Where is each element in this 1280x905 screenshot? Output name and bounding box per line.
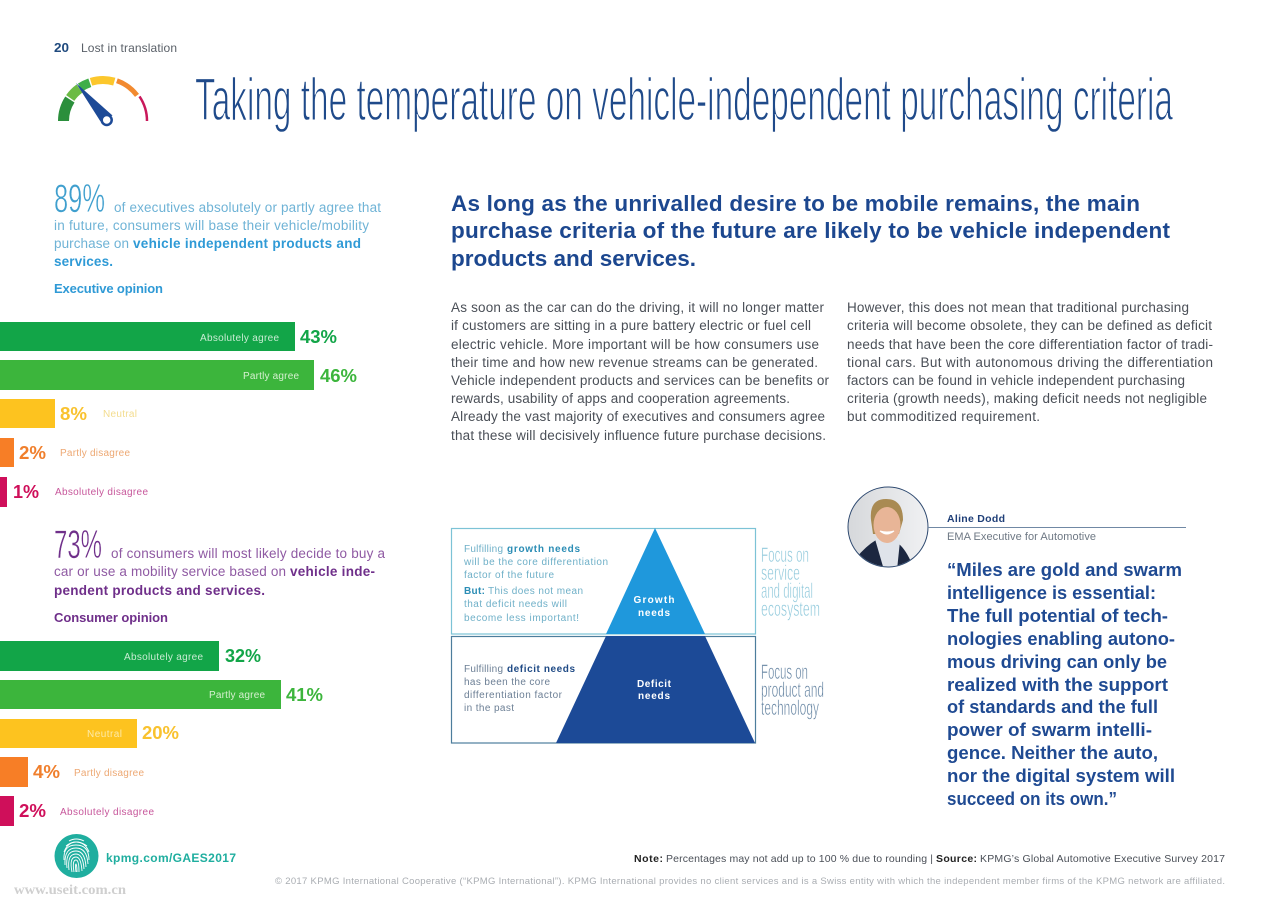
body text: left column xyxy=(451,300,830,443)
icon: fingerprint xyxy=(54,834,98,878)
body text: right column: criteria (growth needs), making deficit needs not negligible xyxy=(847,391,1207,406)
body text: left column: rewards, usability of apps and cooperation agreements. xyxy=(451,391,790,406)
body text: left column: electric vehicle. More important will be how consumers use xyxy=(451,337,819,352)
page header: 20 xyxy=(54,40,69,55)
panel: growth needs: that deficit needs will xyxy=(464,599,567,610)
panel: growth needs: needs xyxy=(638,608,670,619)
body text: right column: However, this does not mean that traditional purchasing xyxy=(847,300,1189,315)
bar chart: executive opinion xyxy=(0,322,357,507)
bar chart: consumer opinion: Neutral xyxy=(87,729,122,740)
body text: left column: if customers are sitting in a pure battery electric or fuel cell xyxy=(451,318,811,333)
panel: consumer opinion xyxy=(0,523,385,826)
panel: growth needs xyxy=(452,528,820,634)
footnote: Source: xyxy=(936,853,977,865)
pull quote: realized with the support xyxy=(947,674,1168,695)
executive statistic: in future, consumers will base their vehicle/mobility xyxy=(54,218,369,233)
body text: right column: tional cars. But with autonomous driving the differentiation xyxy=(847,355,1213,370)
footnote xyxy=(634,853,1225,865)
panel: deficit needs xyxy=(452,636,824,743)
panel: growth needs: and digital xyxy=(761,580,813,603)
bar chart: executive opinion: 46% xyxy=(320,366,357,386)
bar chart: consumer opinion: Partly disagree xyxy=(74,768,144,779)
executive statistic: purchase on xyxy=(54,236,129,251)
main heading: As long as the unrivalled desire to be mobile remains, the main xyxy=(451,191,1140,216)
bar chart: executive opinion: Neutral xyxy=(103,409,137,420)
footnote: Percentages may not add up to 100 % due to rounding | xyxy=(666,853,933,865)
icon: gauge xyxy=(64,80,147,125)
panel: deficit needs: Fulfilling xyxy=(464,664,503,675)
bar chart: consumer opinion: 20% xyxy=(142,723,179,743)
main heading: purchase criteria of the future are likely to be vehicle independent xyxy=(451,218,1170,243)
bar chart: executive opinion: Absolutely disagree xyxy=(55,487,148,498)
executive statistic: of executives absolutely or partly agree that xyxy=(114,200,381,215)
consumer opinion heading: Consumer opinion xyxy=(54,610,168,625)
panel: growth needs: ecosystem xyxy=(761,598,820,621)
panel: deficit needs: Deficit xyxy=(637,679,672,690)
pull quote: nologies enabling autono- xyxy=(947,628,1175,649)
panel: deficit needs: technology xyxy=(761,697,819,720)
copyright: © 2017 KPMG International Cooperative (“KPMG International”). KPMG International provides no client services and is a Swiss entity with which the independent member firms of the KPMG network are affiliated. xyxy=(275,876,1225,887)
executive statistic: 89% xyxy=(54,177,105,221)
pull quote: intelligence is essential: xyxy=(947,582,1156,603)
bar chart: consumer opinion: 4% xyxy=(33,762,60,782)
footnote: Note: xyxy=(634,853,663,865)
panel: growth needs: growth needs xyxy=(507,544,580,555)
body text: right column: needs that have been the core differentiation factor of tradi- xyxy=(847,337,1213,352)
executive statistic: vehicle independent products and xyxy=(133,236,361,251)
panel: growth needs: This does not mean xyxy=(488,586,583,597)
bar chart: consumer opinion: Absolutely disagree xyxy=(60,807,154,818)
body text: right column: but commoditized requirement. xyxy=(847,409,1040,424)
executive statistic xyxy=(54,177,381,269)
portrait: Aline Dodd xyxy=(848,487,928,570)
bar chart: consumer opinion: 41% xyxy=(286,685,323,705)
pull quote: nor the digital system will xyxy=(947,765,1175,786)
bar chart: executive opinion: 2% xyxy=(19,443,46,463)
body text: right column xyxy=(847,300,1213,424)
pull quote xyxy=(947,559,1182,809)
body text: left column: Vehicle independent products and services can be benefits or xyxy=(451,373,830,388)
website link: kpmg.com/GAES2017 xyxy=(106,851,236,865)
quote attribution xyxy=(928,513,1186,543)
bar chart: executive opinion: Partly agree xyxy=(243,371,299,382)
bar chart: consumer opinion: 32% xyxy=(225,646,261,666)
pull quote: power of swarm intelli- xyxy=(947,719,1152,740)
bar chart: executive opinion: 1% xyxy=(13,482,39,502)
pyramid diagram xyxy=(452,528,824,743)
panel: growth needs: become less important! xyxy=(464,613,579,624)
body text: left column: their time and how new revenue streams can be generated. xyxy=(451,355,818,370)
footnote: KPMG’s Global Automotive Executive Survey 2017 xyxy=(980,853,1225,865)
panel: growth needs: will be the core differentiation xyxy=(463,557,608,568)
main heading xyxy=(451,191,1170,271)
panel: growth needs: Focus on xyxy=(761,544,809,567)
pull quote: of standards and the full xyxy=(947,696,1158,717)
bar chart: executive opinion: 8% xyxy=(60,404,87,424)
executive opinion heading: Executive opinion xyxy=(54,281,163,296)
panel: growth needs: Growth xyxy=(634,595,674,606)
panel: deficit needs: Focus on xyxy=(761,661,808,684)
panel: deficit needs: differentiation factor xyxy=(464,690,563,701)
panel: deficit needs: needs xyxy=(638,691,670,702)
bar chart: executive opinion: 43% xyxy=(300,327,337,347)
panel: executive opinion xyxy=(0,177,381,507)
main heading: products and services. xyxy=(451,246,696,271)
quote attribution: Aline Dodd xyxy=(947,513,1005,525)
bar chart: executive opinion: Absolutely agree xyxy=(200,333,279,344)
page header: Lost in translation xyxy=(81,41,177,55)
panel: deficit needs: has been the core xyxy=(464,677,550,688)
panel: deficit needs: in the past xyxy=(464,703,514,714)
panel: growth needs: service xyxy=(761,562,800,585)
pull quote: mous driving can only be xyxy=(947,651,1167,672)
body text: left column: that these will decisively influence future purchase decisions. xyxy=(451,428,826,443)
pull quote: gence. Neither the auto, xyxy=(947,742,1158,763)
pull quote: succeed on its own.” xyxy=(947,788,1117,809)
bar chart: consumer opinion: Absolutely agree xyxy=(124,652,203,663)
consumer statistic: of consumers will most likely decide to buy a xyxy=(111,546,385,561)
bar chart: consumer opinion: 2% xyxy=(19,801,46,821)
panel: growth needs: factor of the future xyxy=(464,570,554,581)
consumer statistic: 73% xyxy=(54,523,102,567)
consumer statistic: car or use a mobility service based on xyxy=(54,564,286,579)
pull quote: “Miles are gold and swarm xyxy=(947,559,1182,580)
consumer statistic: pendent products and services. xyxy=(54,583,265,598)
panel: deficit needs: deficit needs xyxy=(507,664,575,675)
consumer statistic: vehicle inde- xyxy=(290,564,375,579)
body text: right column: criteria will become obsolete, they can be defined as deficit xyxy=(847,318,1212,333)
panel: deficit needs: product and xyxy=(761,679,824,702)
executive statistic: services. xyxy=(54,254,113,269)
panel: growth needs: But: xyxy=(464,586,485,597)
consumer statistic xyxy=(54,523,385,598)
body text: left column: Already the vast majority of executives and consumers agree xyxy=(451,409,825,424)
body text: left column: As soon as the car can do the driving, it will no longer matter xyxy=(451,300,824,315)
bar chart: consumer opinion: Partly agree xyxy=(209,690,265,701)
body text: right column: factors can be found in vehicle independent purchasing xyxy=(847,373,1185,388)
quote attribution: EMA Executive for Automotive xyxy=(947,531,1096,543)
bar chart: executive opinion: Partly disagree xyxy=(60,448,130,459)
bar chart: consumer opinion xyxy=(0,641,323,826)
watermark: www.useit.com.cn xyxy=(14,883,126,898)
pull quote: The full potential of tech- xyxy=(947,605,1168,626)
panel: growth needs: Fulfilling xyxy=(464,544,503,555)
